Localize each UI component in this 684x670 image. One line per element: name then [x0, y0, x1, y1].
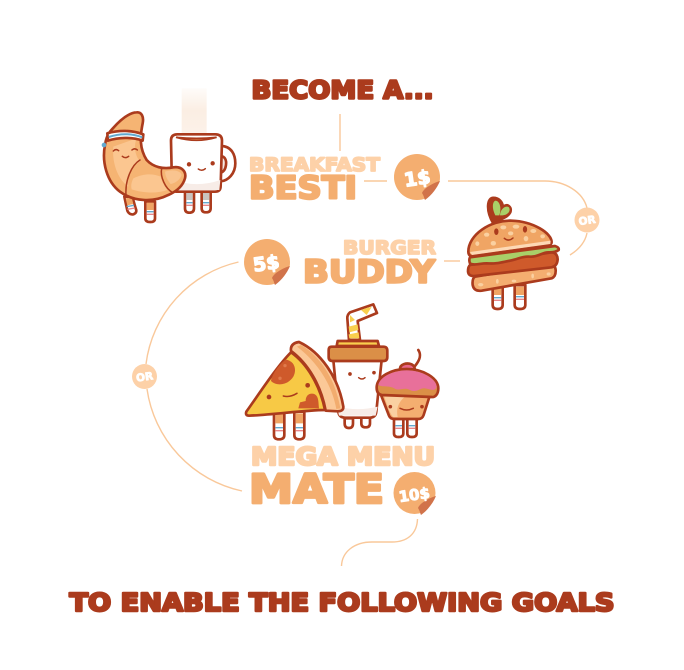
connector: or to burger: [570, 233, 587, 255]
cupcake face: [388, 405, 392, 408]
price badge: 1$: 1$: [403, 166, 432, 192]
cupcake base: [381, 395, 430, 419]
burger face: [494, 228, 498, 235]
headband: [107, 131, 143, 141]
cup legs: [345, 418, 370, 428]
or badge left: OR: [135, 370, 154, 385]
or badge right: [574, 208, 600, 232]
straw: [347, 304, 377, 340]
tier label: breakfast besti: [249, 155, 380, 206]
illustration: burger: [468, 197, 559, 309]
subtitle: burger: BURGER: [343, 238, 436, 259]
frosting: [377, 369, 438, 397]
name: mate: MATE: [249, 467, 384, 513]
connector: mate to goals: [342, 519, 418, 566]
legs: [493, 287, 503, 309]
pizza face: [267, 395, 271, 399]
patty: [468, 252, 558, 276]
mug face: [187, 162, 191, 166]
price badge: 5$: [244, 239, 295, 285]
mug body: [171, 134, 222, 192]
subtitle: breakfast: BREAKFAST: [249, 155, 380, 176]
cherry: [400, 364, 415, 371]
connector: big arc left: [146, 262, 242, 491]
pepperoni: [271, 360, 295, 384]
cup face: [348, 372, 352, 376]
lettuce: [469, 246, 559, 265]
connectors around 1$ badge: [364, 181, 587, 208]
or badge left: [132, 364, 157, 389]
mug legs: [185, 192, 211, 213]
connector: burger to buddy: [444, 260, 460, 262]
cup body: [333, 360, 382, 418]
cupcake legs: [394, 418, 417, 437]
croissant body: [104, 112, 185, 200]
name: besti: BESTI: [249, 170, 357, 206]
or badge right: OR: [578, 214, 596, 228]
mug handle: [221, 146, 235, 181]
croissant legs: [124, 197, 136, 214]
connector: heading to breakfast tier: [339, 114, 341, 151]
cherry stem: [415, 350, 420, 366]
tier label: burger buddy: [303, 238, 436, 290]
price badge: 5$: 5$: [252, 251, 281, 277]
leaf sprout: [488, 197, 511, 223]
price badge: 1$: [394, 154, 445, 200]
pizza slice: [246, 352, 325, 416]
croissant face: [113, 149, 137, 151]
illustration: croissant and coffee mug: [102, 88, 235, 222]
illustration: pizza, drink and cupcake: [246, 304, 438, 439]
lid: [337, 341, 379, 346]
subtitle: mega menu: MEGA MENU: [251, 442, 435, 471]
heading: to enable the following goals: TO ENABLE THE FOLLOWING GOALS: [70, 588, 614, 617]
tier label: mega menu mate: [249, 442, 435, 513]
steam: [182, 88, 207, 133]
price badge: 10$: 10$: [398, 484, 431, 506]
pizza legs: [274, 413, 284, 439]
pizza crust: [291, 342, 343, 411]
name: buddy: BUDDY: [303, 254, 436, 290]
bottom bun: [473, 264, 556, 291]
top bun: [468, 221, 552, 256]
heading: become a: BECOME A...: [252, 76, 434, 104]
price badge: 10$: [394, 472, 441, 515]
